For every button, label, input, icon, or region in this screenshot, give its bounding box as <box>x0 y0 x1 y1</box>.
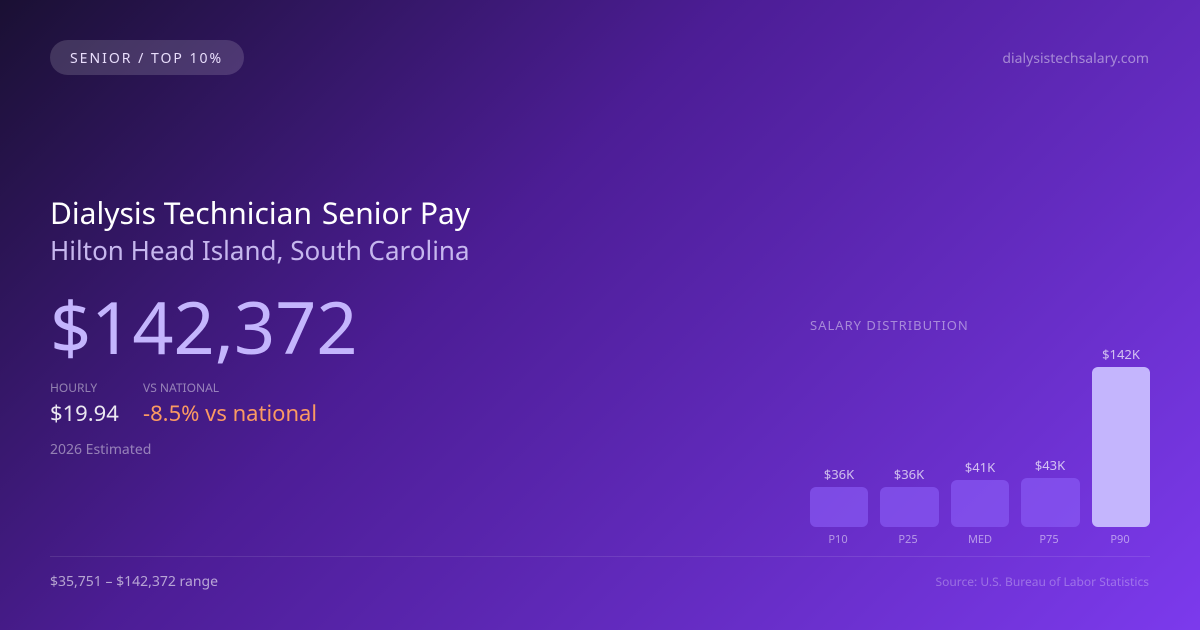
chart: salary distribution: P75 <box>1039 532 1059 547</box>
main salary: $142,372 <box>50 278 358 376</box>
badge <box>50 40 244 75</box>
vs national stat <box>143 379 317 428</box>
title: Dialysis Technician Senior Pay <box>50 192 470 233</box>
site domain: dialysistechsalary.com <box>1002 49 1149 68</box>
chart: salary distribution <box>810 316 1150 547</box>
footer divider <box>50 556 1150 557</box>
year note: 2026 Estimated <box>50 440 151 459</box>
vs national value: -8.5% vs national <box>143 398 317 428</box>
location subtitle: Hilton Head Island, South Carolina <box>50 232 470 268</box>
chart: salary distribution: P25 <box>898 532 918 547</box>
badge: SENIOR / TOP 10% <box>70 49 223 68</box>
chart heading: SALARY DISTRIBUTION <box>810 316 969 334</box>
salary range: $35,751 – $142,372 range <box>50 572 218 591</box>
hourly label: HOURLY <box>50 379 97 396</box>
bar P10: $36K <box>824 465 854 483</box>
hourly stat <box>50 379 119 428</box>
bar P75: $43K <box>1035 456 1065 474</box>
bar median: $41K <box>965 458 995 476</box>
chart: salary distribution: P10 <box>828 532 848 547</box>
bar P25: $36K <box>894 465 924 483</box>
vs national label: VS NATIONAL <box>143 379 219 396</box>
chart: salary distribution: P90 <box>1110 532 1130 547</box>
hourly value: $19.94 <box>50 398 119 428</box>
source: Source: U.S. Bureau of Labor Statistics <box>936 573 1149 590</box>
chart: salary distribution: MED <box>968 532 992 547</box>
bar P90: $142K <box>1102 345 1140 363</box>
